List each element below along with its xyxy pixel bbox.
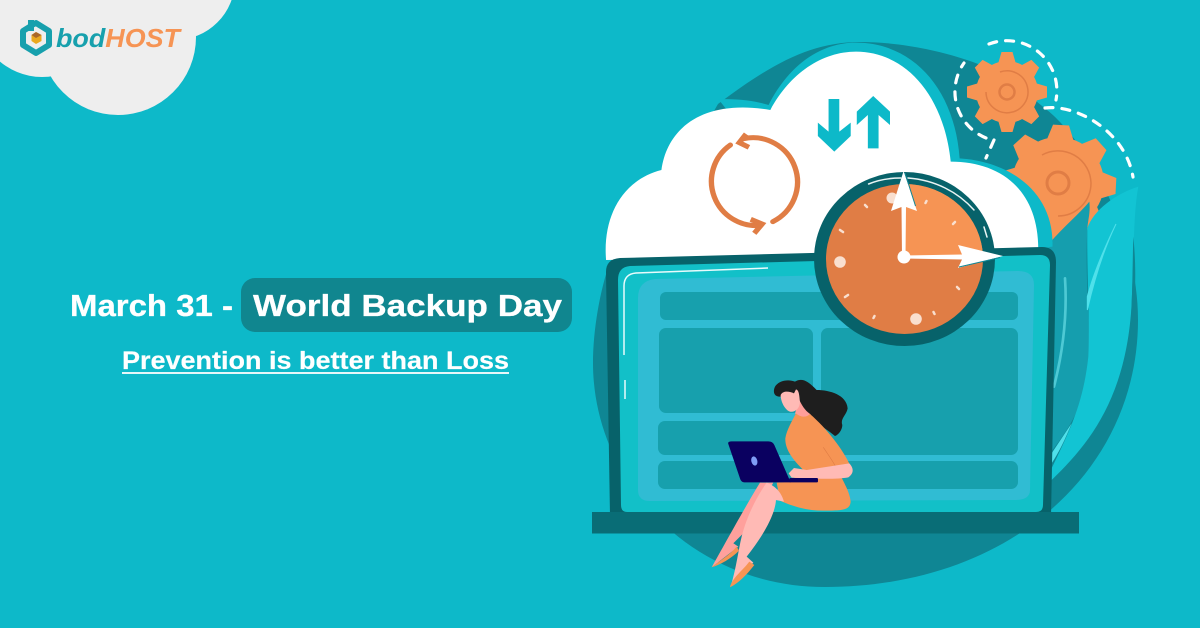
- cloud: [606, 43, 1053, 263]
- icon: transfer arrows: [818, 96, 890, 152]
- front leaf: light: [1050, 187, 1138, 500]
- logo: bodHOST: [23, 20, 182, 53]
- headline title: World Backup Day: [253, 288, 563, 323]
- dashed orbit lines: [955, 41, 1133, 177]
- clock face: [826, 184, 983, 334]
- headline pill: [241, 278, 572, 332]
- arm: [789, 463, 853, 479]
- small laptop: [728, 441, 818, 482]
- logo wordmark: bodHOST: [56, 23, 182, 53]
- background blob: [593, 42, 1138, 587]
- hair: [774, 380, 848, 436]
- gear: large: [999, 124, 1117, 242]
- screen panel: [638, 271, 1034, 501]
- front leg: [731, 483, 784, 587]
- headline date: March 31 -: [70, 288, 233, 323]
- icon: hexagon logo mark: [23, 20, 49, 53]
- screen cells: [658, 292, 1018, 489]
- gear: small: [967, 52, 1047, 132]
- clock major ticks: [834, 192, 922, 325]
- laptop: [592, 247, 1079, 534]
- laptop base: [592, 512, 1079, 534]
- logo cloud panel: [0, 0, 235, 115]
- illustration: [592, 41, 1138, 587]
- cloud rim: [719, 43, 1053, 263]
- tagline: Prevention is better than Loss: [122, 347, 509, 375]
- back leaf: dark: [1047, 202, 1090, 453]
- screen glare: [624, 268, 768, 399]
- clock minor ticks: [840, 201, 959, 318]
- laptop screen: [618, 255, 1050, 512]
- cloud body: [606, 52, 1038, 260]
- clock hands: [891, 171, 1003, 268]
- back leg: [712, 483, 773, 567]
- laptop frame: [606, 247, 1056, 516]
- icon: sync arrows: [711, 134, 798, 233]
- sleeve fold: [823, 447, 836, 467]
- face: [781, 389, 800, 412]
- dress: [777, 413, 851, 511]
- clock: [814, 171, 1003, 346]
- headline: [70, 278, 572, 332]
- neck: [795, 400, 811, 417]
- clock rim: [814, 172, 995, 346]
- shoes: [712, 547, 739, 567]
- clock glare: [869, 178, 987, 237]
- woman with laptop: [712, 380, 853, 587]
